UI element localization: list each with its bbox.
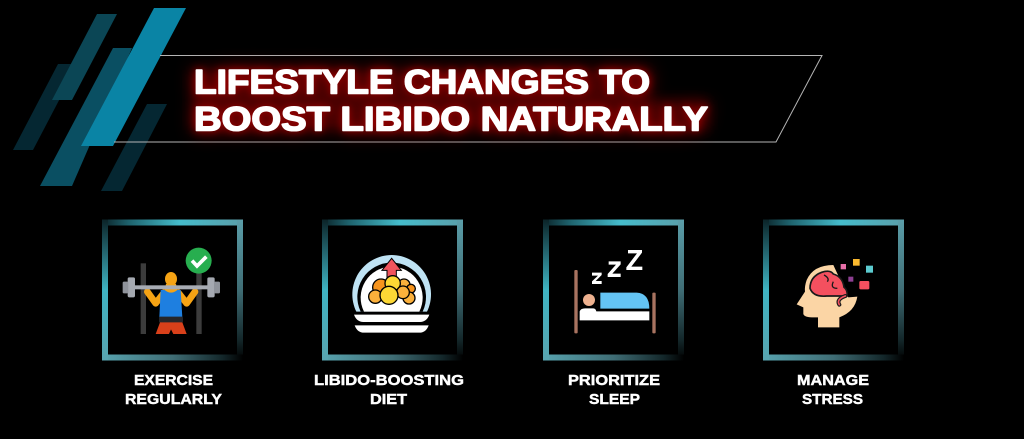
title glow <box>192 70 708 130</box>
decorative diagonal bars <box>13 8 186 191</box>
icon: sleeping person in bed <box>574 250 656 333</box>
icon: head with brain <box>797 259 873 327</box>
icon: weightlifter <box>123 248 220 334</box>
frame <box>322 220 463 360</box>
label: REGULARLY <box>125 391 222 408</box>
card: libido-boosting diet <box>314 220 464 408</box>
card: prioritize sleep <box>543 220 684 408</box>
label: LIBIDO-BOOSTING <box>314 372 464 389</box>
label <box>314 372 464 408</box>
label: PRIORITIZE <box>568 372 660 389</box>
frame <box>763 220 904 360</box>
label: STRESS <box>802 391 863 408</box>
card: manage stress <box>763 220 904 408</box>
icon: food plate with arrow <box>352 255 431 333</box>
label: SLEEP <box>589 391 640 408</box>
label <box>797 372 869 408</box>
label: MANAGE <box>797 372 869 389</box>
title: BOOST LIBIDO NATURALLY <box>194 100 708 138</box>
frame <box>543 220 684 360</box>
frame <box>102 220 243 360</box>
label: EXERCISE <box>134 372 213 389</box>
title frame <box>114 56 822 142</box>
label: DIET <box>370 391 407 408</box>
label <box>568 372 660 408</box>
card: exercise regularly <box>102 220 243 408</box>
title: LIFESTYLE CHANGES TO <box>194 64 650 102</box>
title <box>194 64 708 138</box>
label <box>125 372 222 408</box>
